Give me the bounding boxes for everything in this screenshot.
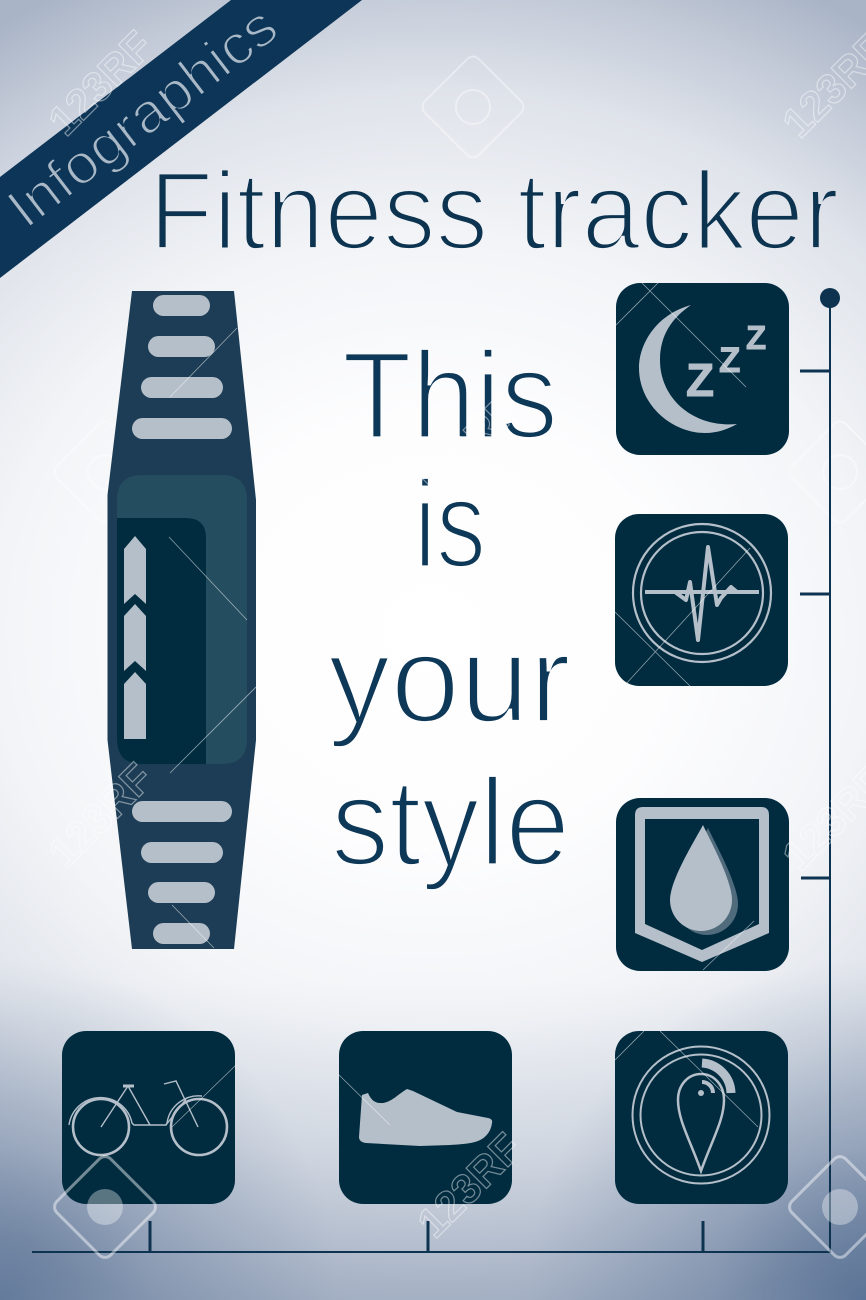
slogan <box>328 327 571 892</box>
slogan: This <box>342 327 558 465</box>
icon: water drop <box>616 798 789 971</box>
icon: sleep: Z <box>719 341 740 380</box>
fitness tracker band <box>108 291 256 949</box>
watermark text: 123RF <box>39 22 162 144</box>
watermark text: 123RF <box>405 386 528 508</box>
watermark stamps over the lower icons <box>51 1153 866 1261</box>
icon: sleep: Z <box>746 319 766 356</box>
slogan: style <box>331 754 570 892</box>
ribbon label: Infographics <box>0 0 289 240</box>
corner ribbon <box>0 0 362 278</box>
icon: shoe <box>339 1031 512 1204</box>
slogan: your <box>328 611 571 749</box>
icon: sleep: Z <box>686 354 714 406</box>
axis lines <box>32 288 840 1252</box>
watermark text: 123RF <box>39 754 162 876</box>
slogan: is <box>414 456 486 594</box>
title: Fitness tracker <box>149 149 839 273</box>
watermark text: 123RF <box>408 1124 531 1246</box>
tracker arrows <box>124 536 146 739</box>
watermark hairlines <box>169 283 758 1127</box>
watermark stamps <box>51 53 866 894</box>
icon: sleep <box>616 283 789 455</box>
icon: bicycle <box>62 1031 235 1204</box>
icon: heart rate <box>615 514 788 686</box>
tracker strap holes <box>132 295 232 944</box>
icon: location <box>615 1031 788 1204</box>
